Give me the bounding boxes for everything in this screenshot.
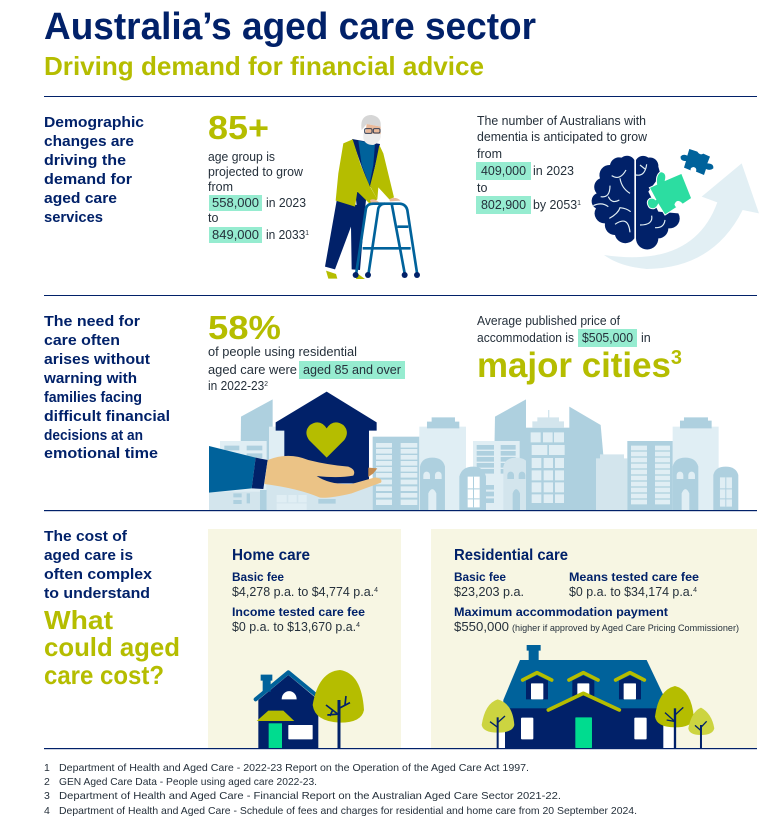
footnotes: 4: [44, 805, 50, 817]
heading: cost of aged care: often complex: [44, 566, 153, 583]
heading: demographic changes: Demographic: [44, 114, 144, 131]
panel: residential care: $550,000: [454, 620, 509, 634]
panel: residential care: Residential care: [454, 547, 568, 564]
stat: dementia growth: [476, 114, 648, 214]
stat: accommodation price: major cities: [477, 346, 672, 385]
heading: need for care: decisions at an: [44, 427, 143, 444]
stat: 85+ age group: age group is: [208, 150, 275, 164]
panel: residential care: (higher if approved by Aged Care Pricing Commissioner): [512, 623, 739, 634]
stat: 85+ age group: 1: [305, 230, 309, 237]
heading: need for care: care often: [44, 332, 120, 349]
heading: need for care: emotional time: [44, 445, 158, 462]
stat: 58 percent: of people using residential: [208, 345, 357, 359]
heading: demographic changes: changes are: [44, 133, 134, 150]
panel: home care: Income tested care fee: [232, 605, 365, 619]
stat: 58 percent: aged 85 and over: [303, 363, 401, 377]
stat: accommodation price: accommodation is: [477, 331, 574, 345]
footnotes: 2: [44, 776, 50, 788]
callout: what could aged care cost: care cost?: [44, 660, 164, 690]
stat: dementia growth: 802,900: [481, 198, 526, 212]
stat: dementia growth: dementia is anticipated to grow: [477, 130, 648, 144]
footnotes: [44, 762, 637, 817]
heading: need for care: The need for: [44, 313, 140, 330]
stat: dementia growth: in 2023: [533, 164, 574, 178]
heading: cost of aged care: The cost of: [44, 528, 128, 545]
stat: 58 percent: aged care were: [208, 363, 297, 377]
stat: 58 percent: 58%: [208, 309, 281, 346]
heading: cost of aged care: to understand: [44, 585, 150, 602]
heading: cost of aged care: aged care is: [44, 547, 133, 564]
panel: home care: Basic fee: [232, 570, 284, 584]
stat: dementia growth: by 2053: [533, 198, 577, 212]
stat: dementia growth: The number of Australians with: [477, 114, 646, 128]
stat: 85+ age group: projected to grow: [208, 165, 304, 179]
stat: dementia growth: 1: [577, 200, 581, 207]
stat: 85+ age group: [208, 109, 309, 243]
panel: residential care: 4: [693, 587, 697, 594]
panel: home care: $0 p.a. to $13,670 p.a.: [232, 620, 357, 634]
stat: accommodation price: in: [641, 331, 651, 345]
footnotes: 1: [44, 762, 50, 774]
stat: 85+ age group: 849,000: [212, 228, 259, 242]
footnotes: Department of Health and Aged Care - 2022-23 Report on the Operation of the Aged Care Act 1997.: [59, 762, 529, 774]
icon: brain with puzzle pieces: [592, 149, 713, 249]
panel: residential care: $0 p.a. to $34,174 p.a.: [569, 585, 694, 599]
stat: 58 percent: [208, 309, 405, 393]
stat: dementia growth: to: [477, 181, 487, 195]
footnotes: Department of Health and Aged Care - Schedule of fees and charges for residential and home care from 20 September 2024.: [59, 805, 637, 817]
footnotes: 3: [44, 790, 50, 802]
stat: 85+ age group: 85+: [208, 109, 269, 146]
stat: 58 percent: 2: [264, 381, 268, 388]
footnotes: Department of Health and Aged Care - Financial Report on the Australian Aged Care Sector 2021-22.: [59, 790, 561, 802]
icon: growth arrow: [604, 163, 759, 269]
panel: home care: $4,278 p.a. to $4,774 p.a.: [232, 585, 374, 599]
icon: large residential house with trees: [482, 645, 714, 748]
heading: need for care: families facing: [44, 389, 142, 406]
panel: residential care: $23,203 p.a.: [454, 585, 524, 599]
panel: residential care: [431, 529, 757, 748]
heading: need for care: warning with: [43, 370, 137, 387]
callout: what could aged care cost: could aged: [44, 632, 180, 662]
heading: demographic changes: services: [44, 209, 103, 226]
panel: residential care: Maximum accommodation payment: [454, 605, 668, 619]
stat: accommodation price: $505,000: [582, 331, 633, 345]
stat: 85+ age group: from: [208, 180, 233, 194]
stat: 58 percent: in 2022-23: [208, 379, 267, 393]
stat: accommodation price: Average published price of: [477, 314, 620, 328]
heading: demographic changes: aged care: [44, 190, 117, 207]
heading: need for care: arises without: [44, 351, 150, 368]
heading: need for care: difficult financial: [44, 408, 170, 425]
heading: demographic changes: driving the: [44, 152, 126, 169]
panel: home care: 4: [374, 587, 378, 594]
panel: home care: [208, 529, 401, 748]
stat: 85+ age group: to: [208, 211, 218, 225]
stat: 85+ age group: in 2033: [266, 228, 307, 242]
panel: home care: 4: [356, 622, 360, 629]
footnotes: GEN Aged Care Data - People using aged care 2022-23.: [59, 776, 317, 788]
stat: dementia growth: from: [477, 147, 502, 161]
stat: accommodation price: 3: [671, 347, 682, 369]
stat: 85+ age group: in 2023: [266, 196, 306, 210]
illustration: city skyline: [209, 399, 738, 510]
callout: what could aged care cost: What: [44, 605, 113, 635]
heading: demographic changes: demand for: [44, 171, 132, 188]
panel: residential care: Means tested care fee: [569, 570, 699, 584]
panel: residential care: Basic fee: [454, 570, 506, 584]
subtitle: Driving demand for financial advice: [44, 51, 484, 81]
icon: small house with tree: [256, 670, 364, 748]
stat: 85+ age group: 558,000: [212, 196, 259, 210]
illustration: hand holding house with heart: [209, 392, 381, 498]
panel: home care: Home care: [232, 547, 310, 564]
title: Australia’s aged care sector: [44, 6, 536, 48]
icon: elderly man with walker: [325, 115, 420, 279]
stat: accommodation price: [477, 314, 682, 385]
stat: dementia growth: 409,000: [481, 164, 526, 178]
